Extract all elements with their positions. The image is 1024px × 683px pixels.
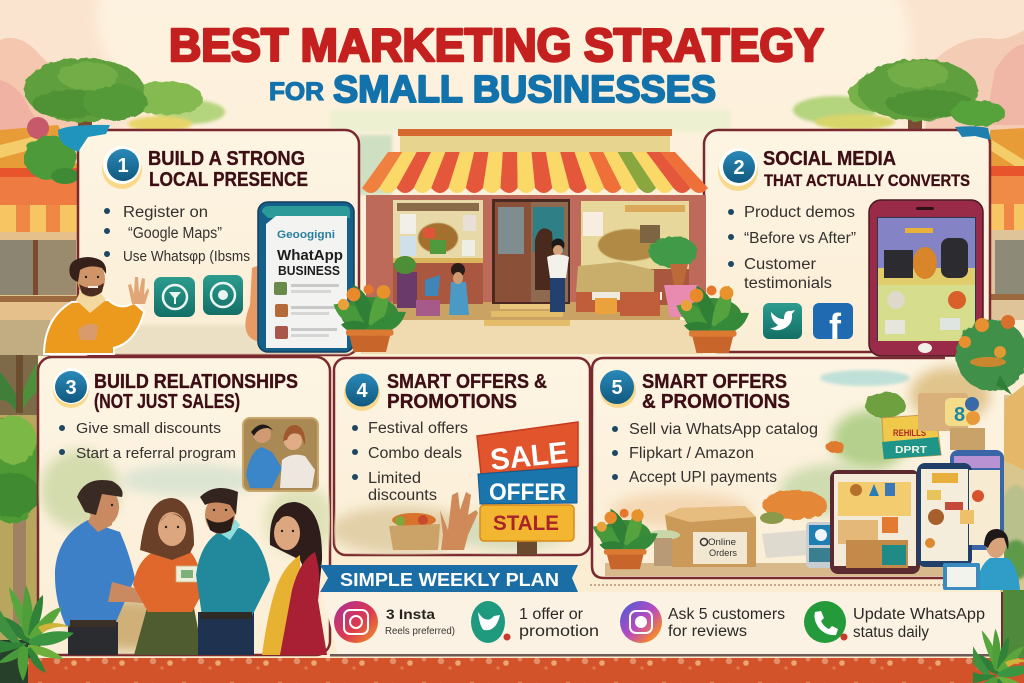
panel 2 number badge: 2 bbox=[733, 157, 745, 179]
plan step 1: Reels preferred) bbox=[385, 625, 455, 637]
panel 5 watercolor landscape bbox=[610, 367, 990, 528]
title: SMALL BUSINESSES bbox=[333, 69, 716, 111]
blue corner ribbon panel 2 bbox=[955, 126, 991, 140]
plan step 2: promotion bbox=[519, 623, 599, 640]
panel 4 watercolor landscape bbox=[330, 506, 570, 554]
panel 3: build relationships bbox=[38, 357, 335, 655]
sale signboards: STALE bbox=[493, 512, 559, 535]
shop pavement bbox=[361, 320, 703, 354]
right pink hills bbox=[880, 0, 1024, 135]
shop upper wall bbox=[400, 136, 670, 154]
panel 1: build a strong local presence bbox=[45, 130, 359, 355]
plan step 3 bbox=[620, 601, 785, 643]
fruit basket bbox=[389, 513, 440, 550]
banknote held by woman bbox=[176, 566, 204, 582]
panel 1 number badge bbox=[102, 146, 142, 189]
panel 4 bullet list: Combo deals bbox=[368, 445, 462, 462]
four people group bbox=[55, 480, 327, 655]
panel 5 heading: & PROMOTIONS bbox=[642, 391, 790, 413]
shop left window bbox=[393, 200, 483, 304]
right tree bbox=[793, 59, 1005, 130]
phone: whatsapp business: BUSINESS bbox=[278, 263, 340, 278]
panel 1 bullet list bbox=[104, 204, 250, 265]
panel 1 bullet list: “Google Maps” bbox=[128, 225, 222, 242]
steps bbox=[484, 304, 570, 326]
man with beard in teal shirt bbox=[196, 488, 270, 655]
panel 5 heading bbox=[642, 371, 790, 413]
flower pot right of shop bbox=[676, 286, 749, 353]
panel 3 heading: (NOT JUST SALES) bbox=[94, 391, 240, 413]
panel 2 heading bbox=[763, 148, 970, 190]
title: BEST MARKETING STRATEGY bbox=[169, 19, 824, 71]
weekly plan panel bbox=[320, 565, 1002, 656]
panel 2 number badge bbox=[718, 148, 758, 191]
phone: reels poster bbox=[869, 200, 983, 356]
panel 2 bullet list: Customer bbox=[744, 256, 816, 273]
panel 3 number badge bbox=[53, 368, 89, 408]
phone: whatsapp business: Geoogigni bbox=[277, 229, 335, 241]
plan step 2 bbox=[471, 601, 599, 643]
panel 2 bullet list bbox=[728, 204, 856, 292]
panel 3 number badge: 3 bbox=[65, 377, 77, 399]
panel 5 bullet list: Flipkart / Amazon bbox=[629, 445, 754, 462]
plan step 1: 3 Insta bbox=[386, 606, 435, 622]
panel 1 heading: BUILD A STRONG bbox=[148, 148, 305, 170]
panel 4 number badge bbox=[344, 374, 380, 411]
online orders box bbox=[665, 506, 756, 567]
panel 5 number badge: 5 bbox=[611, 377, 623, 399]
shop right window bbox=[581, 201, 689, 305]
bottom floral strip bbox=[28, 658, 1024, 683]
couple photo bbox=[243, 418, 318, 491]
panel 1 heading: LOCAL PRESENCE bbox=[149, 169, 308, 191]
hand holding phone bbox=[245, 266, 272, 342]
left side palm and tree bbox=[0, 355, 42, 683]
white tray bbox=[762, 530, 808, 558]
panel 3 watercolor landscape bbox=[40, 450, 335, 651]
central shop illustration bbox=[361, 129, 708, 354]
shop produce stall bbox=[576, 262, 662, 316]
shop cornice bbox=[398, 129, 672, 136]
panel 4: smart offers and promotions bbox=[330, 358, 590, 555]
dotted divider bbox=[590, 584, 945, 586]
raised hand bbox=[440, 492, 478, 550]
store phones bbox=[917, 450, 1004, 567]
woman in orange top bbox=[133, 498, 204, 655]
assistant woman with clipboard bbox=[943, 529, 1020, 590]
online orders box: Orders bbox=[709, 548, 737, 558]
panel 4 heading: PROMOTIONS bbox=[387, 391, 517, 413]
plan step 4: Update WhatsApp bbox=[853, 606, 985, 623]
plan step 2: 1 offer or bbox=[519, 606, 583, 623]
right flowering bush bbox=[956, 315, 1024, 395]
panel 3 bullet list: Give small discounts bbox=[76, 420, 221, 437]
plan step 3: for reviews bbox=[668, 623, 747, 640]
shop porch floor bbox=[390, 302, 680, 320]
reels signboard bbox=[882, 414, 941, 459]
reels signboard: DPRT bbox=[895, 445, 927, 456]
flower pot left of shop bbox=[334, 284, 406, 352]
tablet with store app bbox=[830, 470, 920, 574]
potted leafy plant in shop bbox=[649, 236, 698, 317]
shop customer woman in blue bbox=[449, 263, 469, 315]
panel 4 heading bbox=[387, 371, 547, 413]
icon: facebook bbox=[813, 303, 853, 347]
panel 2 heading: THAT ACTUALLY CONVERTS bbox=[764, 171, 970, 190]
panel 5 bullet list: Accept UPI payments bbox=[629, 469, 777, 486]
phone: whatsapp business bbox=[258, 202, 354, 352]
panel 1 heading bbox=[148, 148, 308, 191]
icon: twitter bbox=[763, 303, 802, 339]
bottom right spiky plant bbox=[973, 629, 1024, 683]
payment terminal bbox=[806, 522, 836, 568]
phone: whatsapp business: WhatApp bbox=[277, 247, 343, 264]
panel 2 bullet list: “Before vs After” bbox=[744, 230, 856, 247]
panel 4 number badge: 4 bbox=[356, 380, 368, 402]
title bbox=[169, 19, 824, 111]
left pink hills bbox=[0, 0, 150, 135]
plan step 4 bbox=[804, 601, 985, 643]
blue corner ribbon panel 1 bbox=[58, 125, 110, 152]
reels signboard: REHILLS bbox=[893, 428, 926, 438]
sale signboards bbox=[477, 422, 578, 555]
number tiles bbox=[918, 393, 985, 450]
shop awning bbox=[362, 152, 708, 193]
panel 5: sell online bbox=[592, 358, 1004, 578]
plan step 1 bbox=[334, 601, 455, 643]
panel 4 bullet list: Limited bbox=[368, 470, 421, 487]
panel 3 heading: BUILD RELATIONSHIPS bbox=[94, 371, 298, 393]
shopkeeper in white shirt bbox=[547, 238, 569, 312]
panel 4 bullet list: Festival offers bbox=[368, 420, 468, 437]
woman in red coat bbox=[262, 502, 327, 655]
sale signboards: OFFER bbox=[489, 479, 566, 506]
shop people at left stand bbox=[394, 256, 440, 316]
left tree bbox=[24, 58, 225, 132]
right shop bbox=[990, 128, 1024, 320]
small bowl stand bbox=[646, 530, 680, 566]
plan step 4: status daily bbox=[853, 624, 929, 641]
panel 5 bullet list bbox=[612, 421, 818, 486]
plan step 3: Ask 5 customers bbox=[668, 606, 785, 623]
panel 5 number badge bbox=[600, 370, 636, 408]
shop door bbox=[492, 199, 570, 304]
bottom left spiky plant bbox=[0, 585, 74, 681]
left shop bbox=[0, 117, 82, 356]
sale signboards: SALE bbox=[489, 436, 570, 477]
panel 4 heading: SMART OFFERS & bbox=[387, 371, 547, 393]
title: FOR bbox=[269, 78, 324, 106]
teal app icons bbox=[154, 275, 243, 317]
panel 5 heading: SMART OFFERS bbox=[642, 371, 787, 393]
plan banner: SIMPLE WEEKLY PLAN bbox=[340, 570, 559, 590]
right side foliage bbox=[998, 385, 1024, 660]
number tiles: 8 bbox=[954, 404, 965, 426]
online orders box: Online bbox=[708, 537, 736, 547]
icon: facebook: f bbox=[829, 306, 842, 347]
panel 3 bullet list: Start a referral program bbox=[76, 445, 236, 462]
panel 3 heading bbox=[94, 371, 298, 413]
panel 2 bullet list: testimonials bbox=[744, 275, 832, 292]
mid distance landscape behind the store bbox=[330, 110, 730, 195]
panel 4 bullet list bbox=[352, 420, 468, 504]
potted plant panel 5 bbox=[593, 509, 658, 569]
panel 2 heading: SOCIAL MEDIA bbox=[763, 148, 896, 170]
panel 1 bullet list: Register on bbox=[123, 204, 208, 221]
man in yellow shirt waving bbox=[45, 257, 149, 353]
shelf bbox=[605, 563, 945, 576]
panel 4 bullet list: discounts bbox=[368, 487, 437, 504]
panel 5 bullet list: Sell via WhatsApp catalog bbox=[629, 421, 818, 438]
panel 1 number badge: 1 bbox=[117, 155, 129, 177]
panel 2 bullet list: Product demos bbox=[744, 204, 855, 221]
panel 2: social media that converts bbox=[704, 130, 990, 356]
shop front wall bbox=[366, 195, 706, 305]
plan banner bbox=[320, 565, 578, 592]
panel 1 bullet list: Use Whatsφp (Ibsms bbox=[123, 249, 250, 265]
orange flower bush bbox=[760, 441, 844, 524]
panel 3 bullet list bbox=[59, 420, 236, 462]
man in blue shirt bbox=[55, 480, 164, 655]
